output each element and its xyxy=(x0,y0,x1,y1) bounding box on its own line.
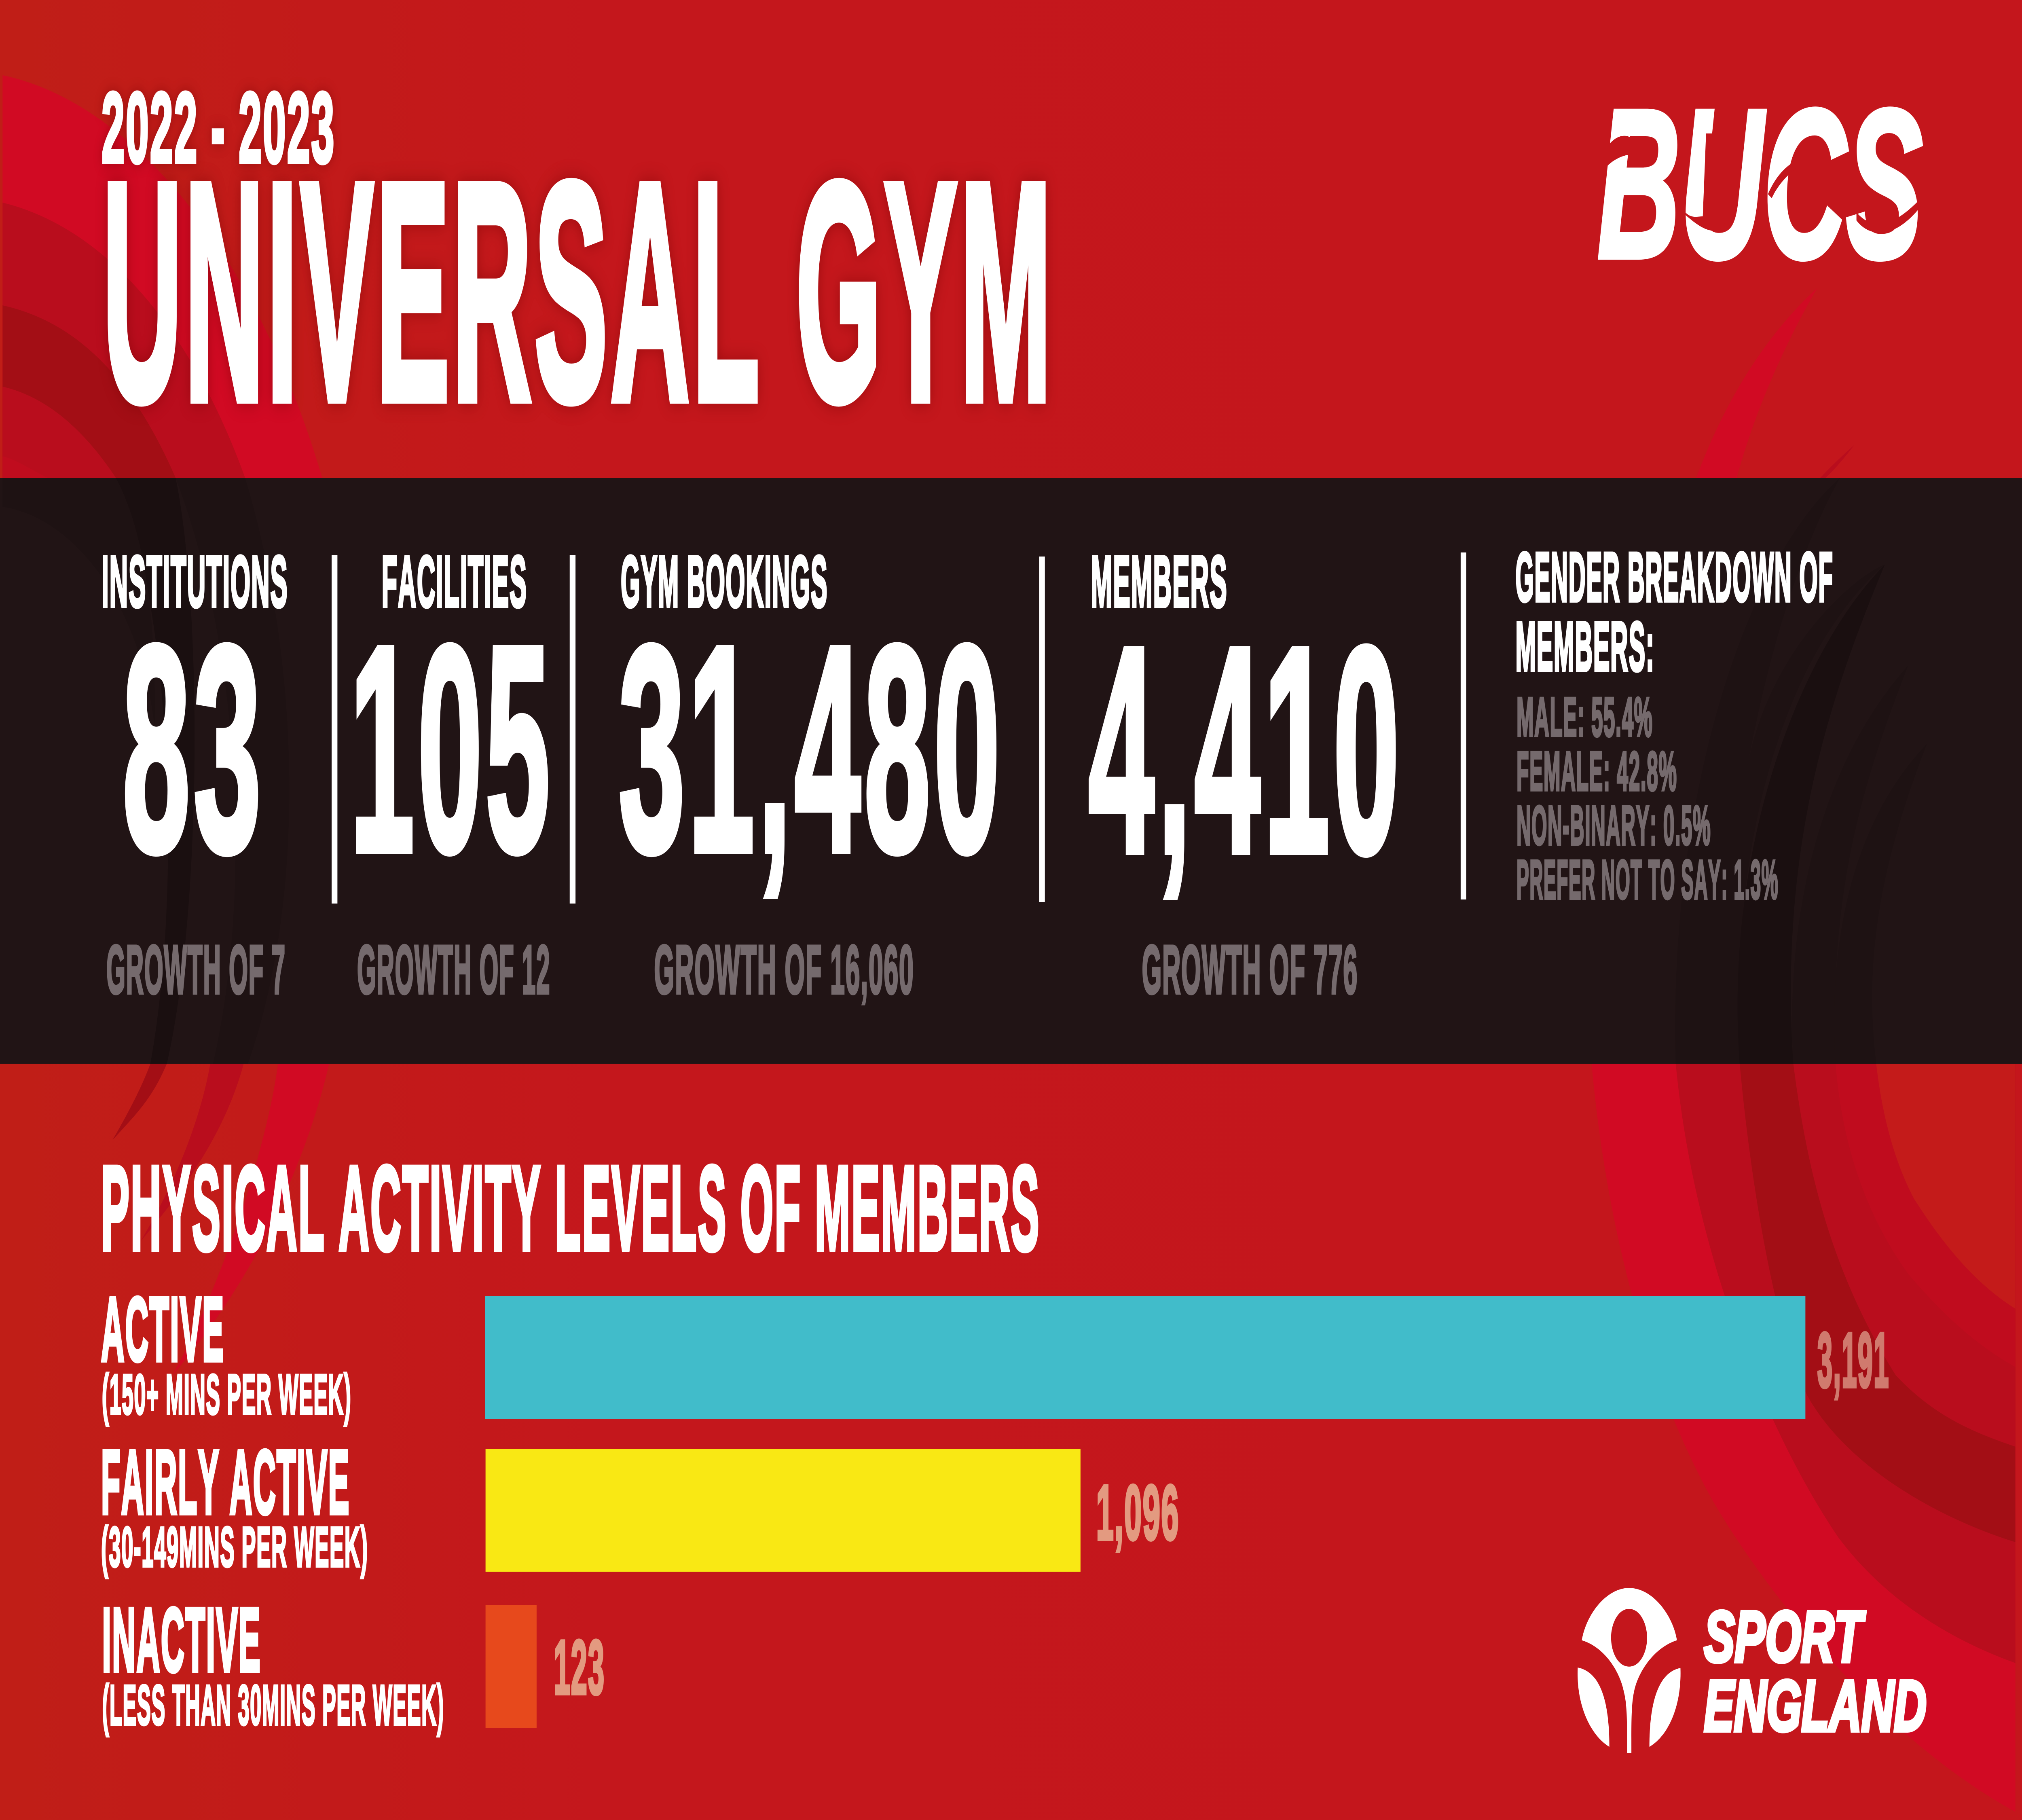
female share: FEMALE: 42.8% xyxy=(1516,741,1677,802)
prefer not to say share: PREFER NOT TO SAY: 1.3% xyxy=(1516,849,1779,911)
divider 3 xyxy=(1039,557,1045,902)
bar: fairly active xyxy=(486,1449,1081,1572)
row label: inactive: INACTIVE xyxy=(102,1589,261,1691)
stat: members xyxy=(1088,541,1403,1008)
left background swoosh xyxy=(2,75,329,1375)
gender breakdown xyxy=(1516,538,1834,911)
institutions label: INSTITUTIONS xyxy=(102,541,288,622)
gym bookings label: GYM BOOKINGS xyxy=(621,541,828,622)
gym bookings value: 31,480 xyxy=(619,585,1003,912)
bar chart: physical activity levels xyxy=(101,1278,1890,1737)
institutions growth: GROWTH OF 7 xyxy=(106,932,286,1008)
value: active: 3,191 xyxy=(1817,1316,1890,1403)
right background swoosh xyxy=(1588,288,2016,1812)
divider 2 xyxy=(570,555,575,904)
value: fairly active: 1,096 xyxy=(1096,1469,1180,1556)
row label: active: ACTIVE xyxy=(101,1278,225,1380)
gym bookings growth: GROWTH OF 16,060 xyxy=(654,932,914,1008)
logo: BUCS: BUCS xyxy=(1597,65,1923,303)
members label: MEMBERS xyxy=(1091,541,1228,622)
section heading: PHYSICAL ACTIVITY LEVELS OF MEMBERS xyxy=(101,1142,1040,1276)
stat: gym bookings xyxy=(619,541,1003,1008)
divider 4 xyxy=(1461,552,1466,899)
year heading: 2022 - 2023 xyxy=(102,72,335,184)
icon: Sport England figure xyxy=(1578,1588,1681,1753)
row sublabel: inactive: (LESS THAN 30MINS PER WEEK) xyxy=(102,1673,444,1737)
facilities growth: GROWTH OF 12 xyxy=(357,932,550,1008)
value: inactive: 123 xyxy=(554,1625,605,1710)
title: UNIVERSAL GYM xyxy=(103,119,1055,465)
members growth: GROWTH OF 776 xyxy=(1142,932,1358,1008)
members value: 4,410 xyxy=(1088,586,1403,914)
divider 1 xyxy=(332,555,337,904)
row sublabel: active: (150+ MINS PER WEEK) xyxy=(102,1363,351,1426)
bar: inactive xyxy=(486,1605,537,1728)
stat: facilities xyxy=(350,541,553,1008)
facilities label: FACILITIES xyxy=(382,541,527,622)
logo wordmark: sport: SPORT xyxy=(1704,1597,1866,1677)
male share: MALE: 55.4% xyxy=(1516,687,1653,748)
institutions value: 83 xyxy=(123,585,264,912)
logo: Sport England xyxy=(1578,1588,1927,1753)
band shadow crescents xyxy=(2,478,1927,1064)
non-binary share: NON-BINARY: 0.5% xyxy=(1516,795,1711,857)
gender heading second line: MEMBERS: xyxy=(1516,608,1655,686)
panel: statistics band xyxy=(0,478,2022,1064)
logo wordmark: england: ENGLAND xyxy=(1704,1666,1927,1746)
facilities value: 105 xyxy=(350,585,553,912)
row label: fairly active: FAIRLY ACTIVE xyxy=(101,1431,350,1533)
row sublabel: fairly active: (30-149MINS PER WEEK) xyxy=(101,1515,368,1579)
stat: institutions xyxy=(102,541,288,1008)
bar: active xyxy=(485,1296,1805,1419)
